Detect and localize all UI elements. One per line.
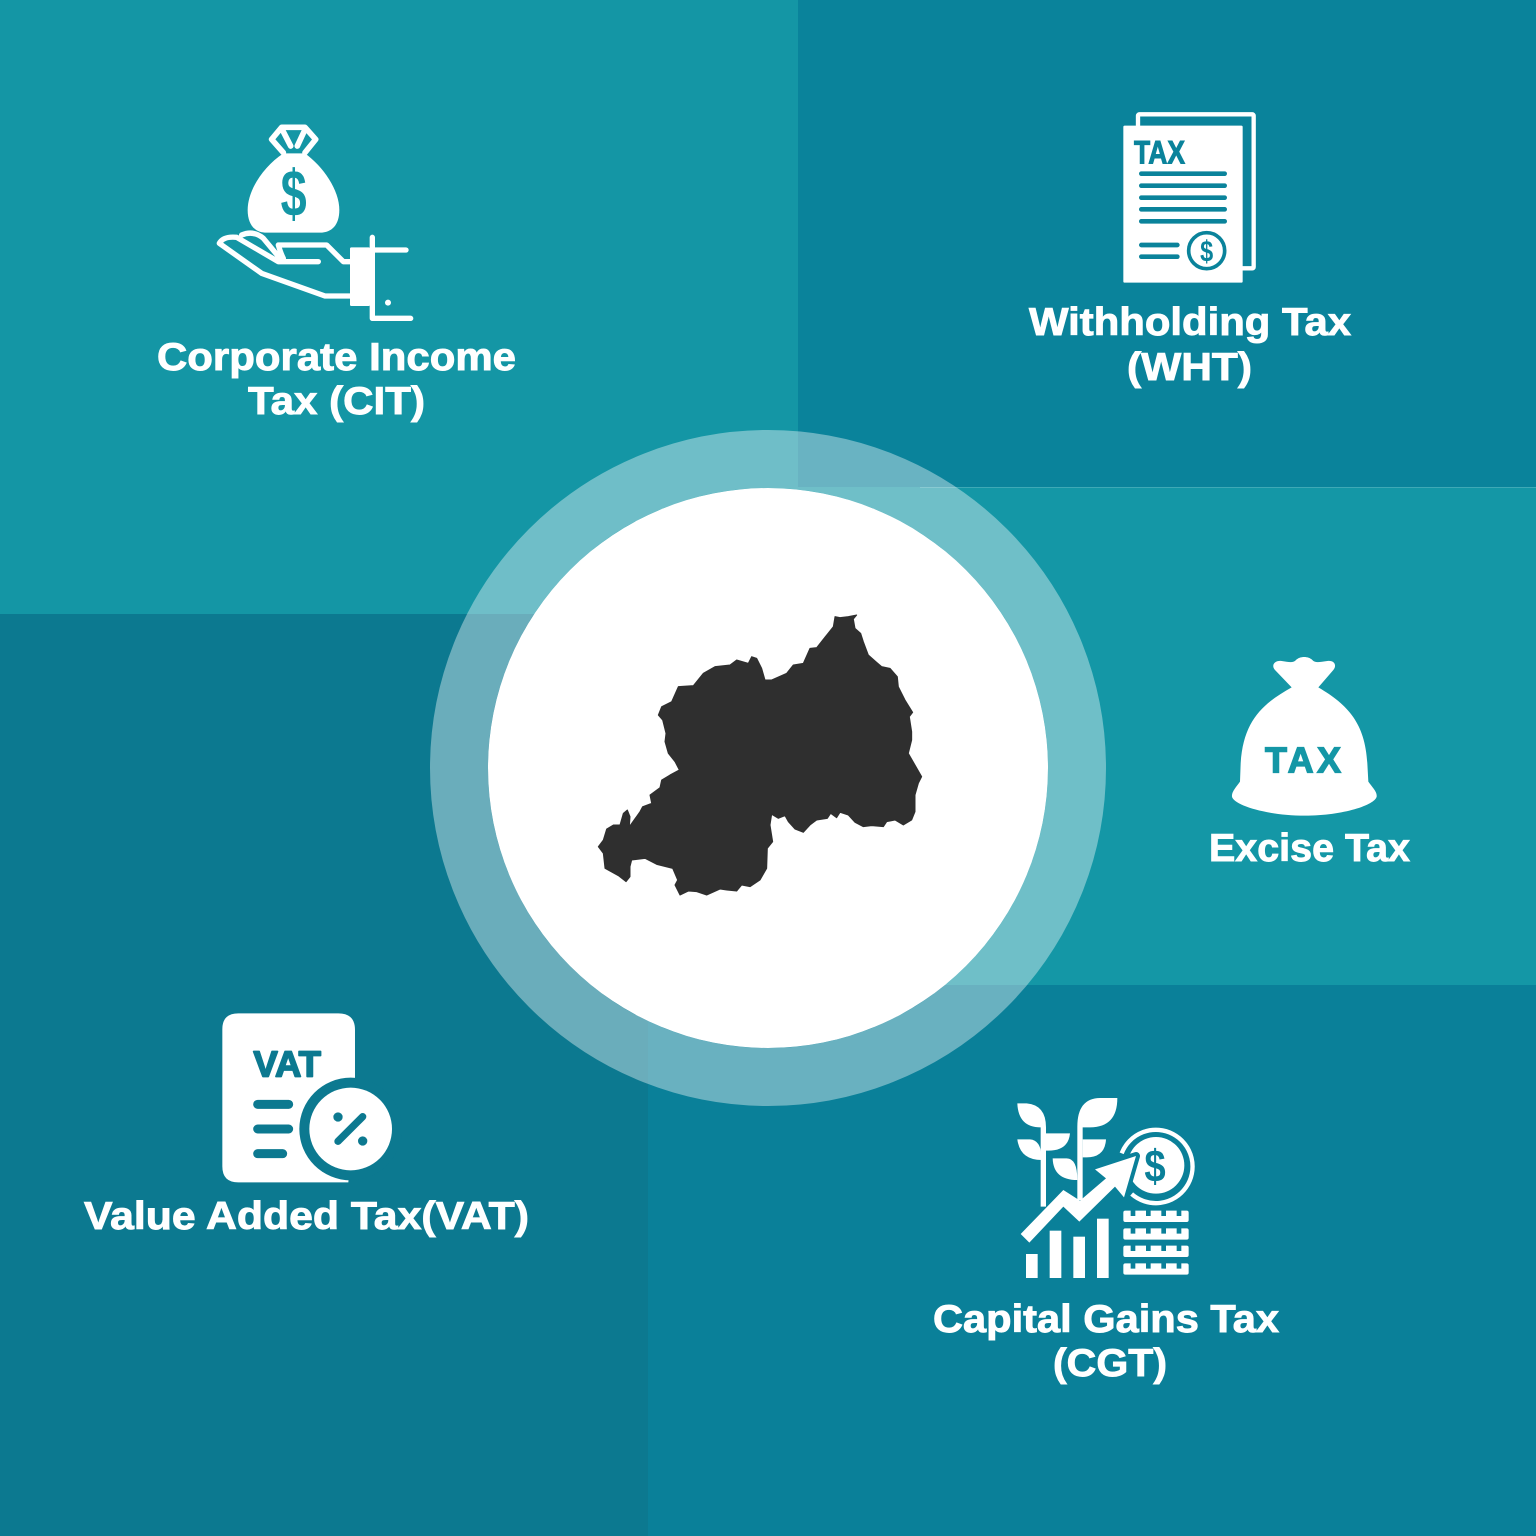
icon: tax bag	[1232, 657, 1377, 816]
icon: tax bag: TAX	[1265, 739, 1344, 780]
icon: money bag on hand: $	[281, 157, 307, 231]
icon: money bag on hand	[219, 127, 411, 318]
heading: value added tax: Value Added Tax(VAT)	[84, 1195, 529, 1238]
heading: withholding tax: Withholding Tax	[1029, 301, 1351, 344]
panel: withholding tax	[798, 0, 1536, 487]
heading: corporate income tax	[157, 336, 516, 423]
heading: capital gains tax: (CGT)	[1053, 1342, 1167, 1385]
heading: corporate income tax: Corporate Income	[157, 336, 516, 379]
map of Rwanda	[598, 615, 922, 895]
panel: background lower right	[648, 985, 1536, 1536]
panel: value added tax	[0, 614, 648, 1536]
heading: excise tax: Excise Tax	[1209, 827, 1410, 870]
panel: corporate income tax	[0, 0, 798, 614]
heading: corporate income tax: Tax (CIT)	[248, 380, 425, 423]
icon: VAT document	[222, 1013, 402, 1182]
panel: excise tax	[768, 487, 1536, 985]
icon: capital gains: $	[1144, 1140, 1166, 1191]
icon: tax documents	[1123, 114, 1254, 283]
center white circle	[488, 488, 1048, 1048]
heading: capital gains tax: Capital Gains Tax	[933, 1298, 1279, 1341]
icon: tax documents: $	[1200, 235, 1213, 268]
center ring	[459, 459, 1077, 1077]
heading: withholding tax: (WHT)	[1127, 346, 1252, 389]
icon: tax documents: TAX	[1134, 134, 1186, 170]
heading: withholding tax	[1029, 301, 1351, 389]
icon: VAT document: VAT	[253, 1044, 321, 1085]
icon: capital gains	[1017, 1098, 1193, 1278]
heading: capital gains tax	[933, 1298, 1279, 1385]
